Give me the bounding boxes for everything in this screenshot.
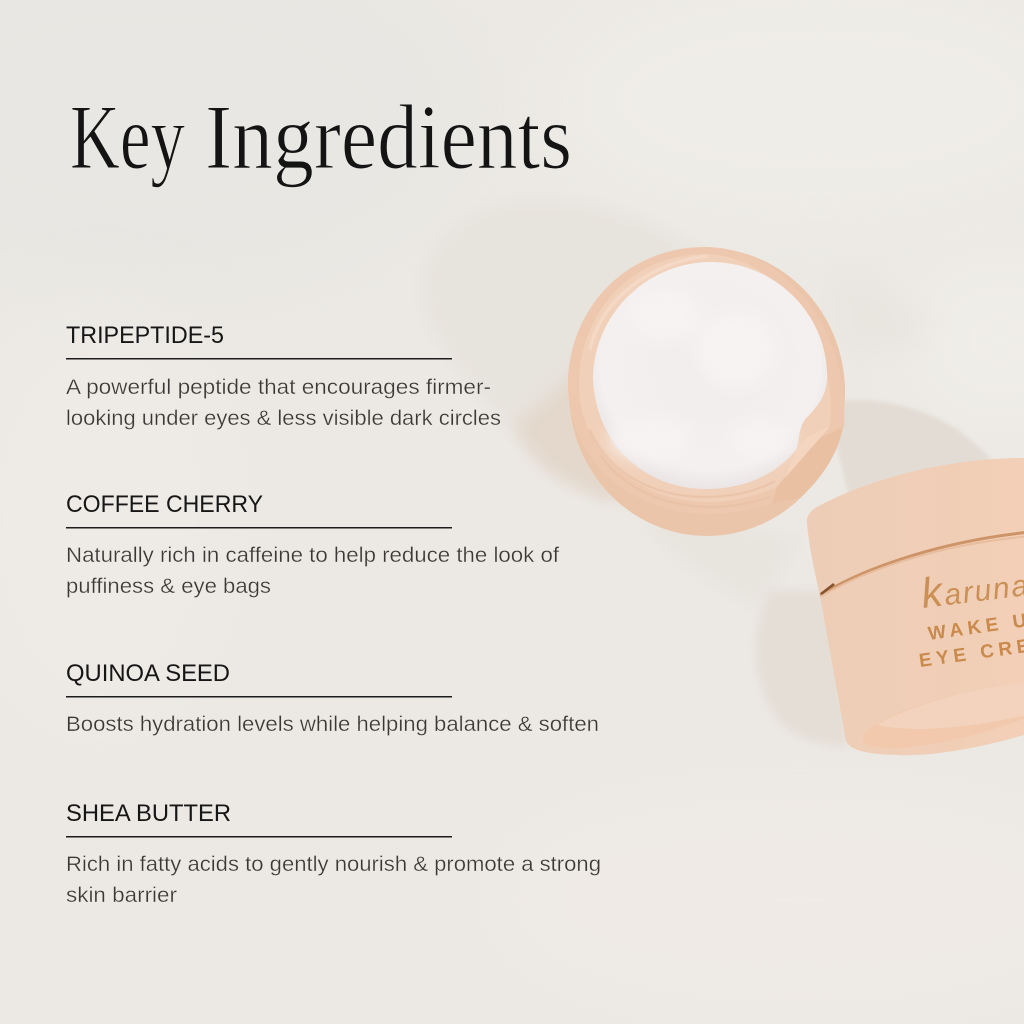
- heading: COFFEE CHERRY: [66, 491, 263, 518]
- product: open jar with cream: [568, 247, 845, 536]
- jar notch ledge: [785, 427, 830, 478]
- description: [66, 375, 501, 430]
- lid body: [807, 458, 1024, 755]
- ingredient: Shea Butter: [66, 800, 601, 907]
- description: Rich in fatty acids to gently nourish & promote a strong: [66, 852, 601, 876]
- lid opening inner: [877, 682, 1024, 729]
- shadow: jar and lid cast shadows: [422, 200, 992, 748]
- title: [70, 86, 572, 188]
- description: A powerful peptide that encourages firmer-: [66, 375, 491, 399]
- heading: SHEA BUTTER: [66, 800, 231, 827]
- description: looking under eyes & less visible dark circles: [66, 406, 501, 430]
- ingredient: Quinoa Seed: [66, 660, 599, 736]
- description: puffiness & eye bags: [66, 574, 271, 598]
- lid opening: [863, 698, 1024, 748]
- lid groove: [820, 532, 1024, 595]
- description: skin barrier: [66, 883, 177, 907]
- jar rim: [568, 247, 844, 514]
- brand label: [918, 557, 1024, 672]
- ingredient: Tripeptide-5: [66, 322, 501, 430]
- cream surface: [593, 262, 827, 489]
- title: Key: [70, 86, 185, 188]
- description: Boosts hydration levels while helping balance & soften: [66, 712, 599, 736]
- heading: TRIPEPTIDE-5: [66, 322, 224, 349]
- title: Ingredients: [205, 86, 572, 188]
- jar base wall: [569, 248, 845, 536]
- product: closed lid and label: [807, 458, 1024, 755]
- jar rim ridges: [590, 430, 775, 507]
- description: [66, 543, 559, 598]
- jar rim inner band: [579, 254, 831, 502]
- description: Naturally rich in caffeine to help reduce the look of: [66, 543, 559, 567]
- ingredient: Coffee Cherry: [66, 491, 559, 598]
- jar top ledge: [590, 256, 708, 350]
- description: [66, 852, 601, 907]
- heading: QUINOA SEED: [66, 660, 230, 687]
- cream highlights: [610, 290, 790, 460]
- jar notch wall: [772, 427, 843, 503]
